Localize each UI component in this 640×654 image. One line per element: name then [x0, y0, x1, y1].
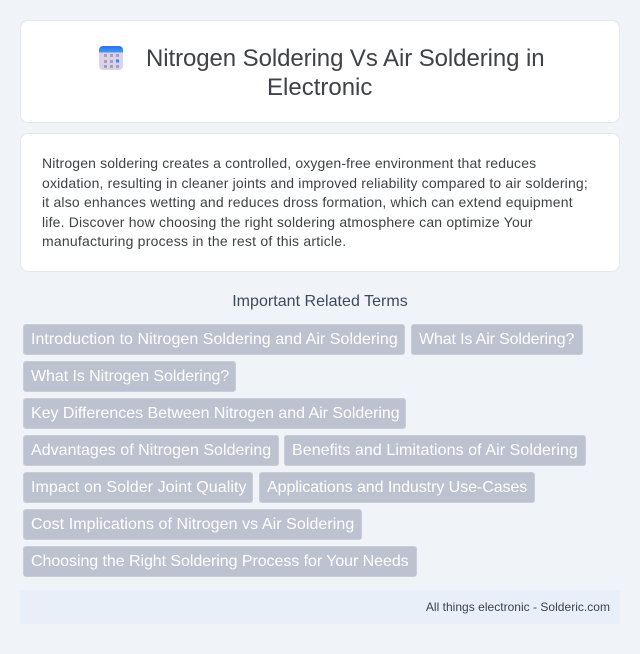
- text block: description: manufacturing process in the rest of this article.: [42, 233, 346, 249]
- tag: [23, 324, 405, 355]
- tag: [284, 435, 586, 466]
- tag: Impact on Solder Joint Quality: [31, 479, 247, 496]
- title: Nitrogen Soldering Vs Air Soldering in: [146, 45, 545, 72]
- icon: calendar: [99, 46, 123, 70]
- tag list: [23, 324, 586, 577]
- heading: related terms: Important Related Terms: [232, 293, 408, 310]
- tag: [23, 472, 253, 503]
- title: Electronic: [267, 74, 372, 101]
- tag: [259, 472, 535, 503]
- tag: Applications and Industry Use-Cases: [267, 479, 527, 496]
- tag: [411, 324, 583, 355]
- tag: [23, 361, 236, 392]
- panel: header: [20, 20, 620, 123]
- title: [146, 45, 545, 101]
- footer: All things electronic - Solderic.com: [426, 600, 610, 614]
- tag: Choosing the Right Soldering Process for Your Needs: [31, 553, 409, 570]
- text block: description: oxidation, resulting in cleaner joints and improved reliability compared to air soldering;: [42, 174, 588, 190]
- tag: [23, 435, 279, 466]
- tag: [23, 546, 417, 577]
- panel: description: [20, 133, 620, 272]
- tag: What Is Nitrogen Soldering?: [31, 368, 229, 385]
- tag: [23, 398, 406, 429]
- tag: What Is Air Soldering?: [419, 331, 574, 348]
- text block: description: [42, 155, 588, 249]
- tag: Key Differences Between Nitrogen and Air Soldering: [31, 405, 400, 422]
- text block: description: life. Discover how choosing the right soldering atmosphere can optimize Your: [42, 214, 533, 230]
- text block: description: it also enhances wetting and reduces dross formation, which can extend equipment: [42, 194, 573, 210]
- tag: Introduction to Nitrogen Soldering and Air Soldering: [31, 331, 398, 348]
- tag: Advantages of Nitrogen Soldering: [31, 442, 271, 459]
- footer: [20, 590, 620, 624]
- text block: description: Nitrogen soldering creates a controlled, oxygen-free environment that reduces: [42, 155, 536, 171]
- tag: Benefits and Limitations of Air Soldering: [292, 442, 578, 459]
- tag: Cost Implications of Nitrogen vs Air Soldering: [31, 516, 354, 533]
- tag: [23, 509, 362, 540]
